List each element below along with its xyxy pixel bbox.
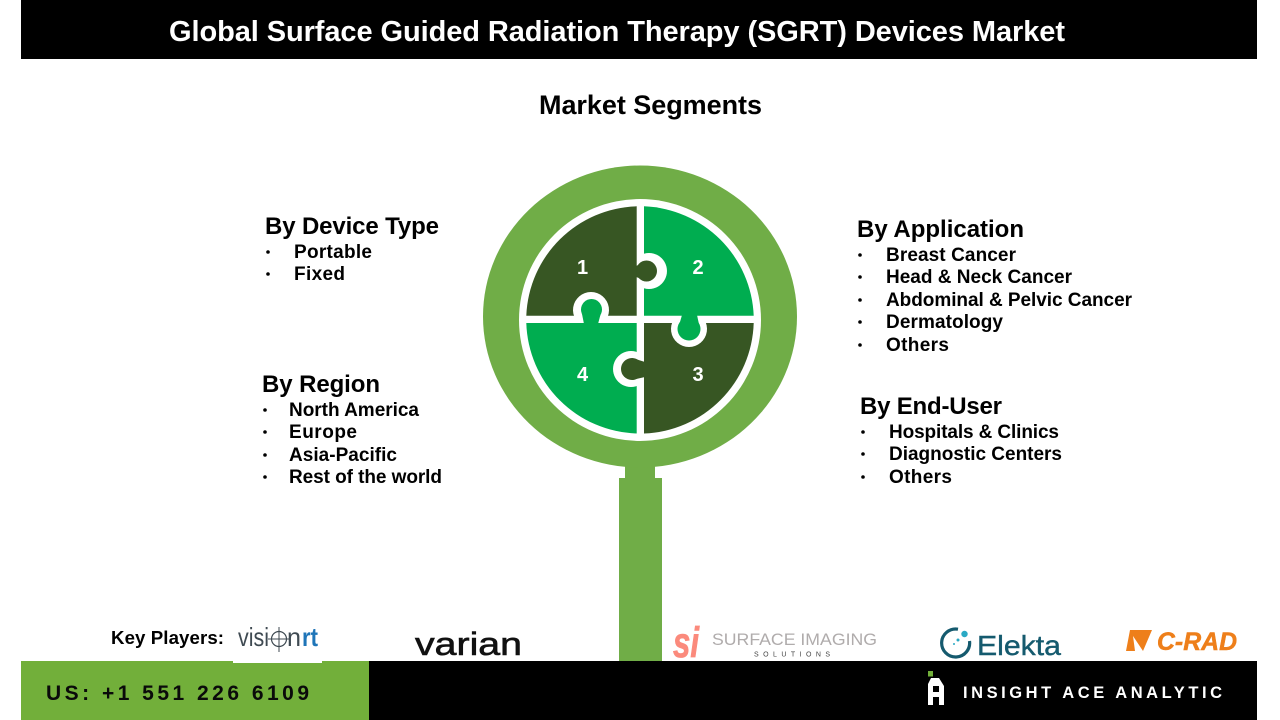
logo: surface imaging solutions xyxy=(673,619,877,667)
segment: by device type xyxy=(265,213,439,285)
segment: by application: Others xyxy=(886,335,949,356)
footer: phone band: US: +1 551 226 6109 xyxy=(46,682,309,705)
magnifier handle xyxy=(619,460,662,661)
tab: piece 1 into 2 xyxy=(636,260,657,282)
segment: by end-user: Others xyxy=(889,467,952,488)
logo: elekta: Elekta xyxy=(977,630,1061,661)
logo: vision rt: n xyxy=(287,622,301,652)
logo: surface imaging solutions: SOLUTIONS xyxy=(754,652,830,658)
puzzle piece 2: 2 xyxy=(692,257,704,279)
segment: by end-user xyxy=(860,393,1062,488)
tab: piece 3 into 4 xyxy=(621,358,645,380)
logo: elekta xyxy=(942,629,1061,661)
segment: by application: Breast Cancer xyxy=(886,245,1017,266)
segment: by region xyxy=(262,371,442,488)
logo: surface imaging solutions: si xyxy=(673,619,700,667)
segment: by end-user: Diagnostic Centers xyxy=(889,444,1062,465)
key players label: Key Players: xyxy=(111,627,224,648)
segment: by application: Abdominal & Pelvic Cancer xyxy=(886,290,1133,311)
puzzle piece 4: 4 xyxy=(577,364,589,386)
segment: by region: Europe xyxy=(289,422,357,443)
brand name: INSIGHT ACE ANALYTIC xyxy=(963,684,1222,702)
brand: insight ace analytic xyxy=(928,671,1222,705)
icon: brand mark xyxy=(928,671,944,705)
logo: vision rt: rt xyxy=(302,622,318,652)
puzzle piece 1: 1 xyxy=(577,257,588,279)
segment: by device type: Fixed xyxy=(294,264,345,285)
segment: by region: Asia-Pacific xyxy=(289,445,397,466)
magnifier with puzzle xyxy=(483,166,797,661)
puzzle piece 2 xyxy=(640,206,754,316)
segment: by device type: By Device Type xyxy=(265,213,439,240)
puzzle piece 1 xyxy=(526,206,637,320)
tab: piece 2 into 3 xyxy=(678,315,700,340)
segment: by application: Head & Neck Cancer xyxy=(886,267,1073,288)
logo: varian: varian xyxy=(415,626,522,662)
puzzle piece 3 xyxy=(644,320,754,434)
segment: by region: By Region xyxy=(262,371,380,398)
segment: by application: By Application xyxy=(857,216,1024,243)
puzzle piece 3: 3 xyxy=(692,364,704,386)
footer: black band xyxy=(369,661,1257,720)
segment: by region: North America xyxy=(289,400,419,421)
white lens xyxy=(519,199,761,441)
heading: market segments: Market Segments xyxy=(539,90,762,120)
logo: vision rt: visi xyxy=(238,622,269,652)
logo: c-rad: C-RAD xyxy=(1157,628,1237,656)
logo: vision rt xyxy=(233,622,322,663)
title bar xyxy=(21,0,1257,59)
segment: by application: Dermatology xyxy=(886,312,1003,333)
segment: by region: Rest of the world xyxy=(289,467,442,488)
title bar: Global Surface Guided Radiation Therapy (SGRT) Devices Market xyxy=(169,16,1065,48)
logo: surface imaging solutions: SURFACE IMAGING xyxy=(712,630,877,649)
magnifier ring xyxy=(483,166,797,468)
tab: piece 4 into 1 xyxy=(581,299,602,324)
segment: by application xyxy=(857,216,1133,356)
segment: by end-user: Hospitals & Clinics xyxy=(889,422,1059,443)
segment: by device type: Portable xyxy=(294,242,372,263)
segment: by end-user: By End-User xyxy=(860,393,1002,420)
footer: phone band xyxy=(21,661,369,720)
puzzle piece 4 xyxy=(526,323,640,434)
